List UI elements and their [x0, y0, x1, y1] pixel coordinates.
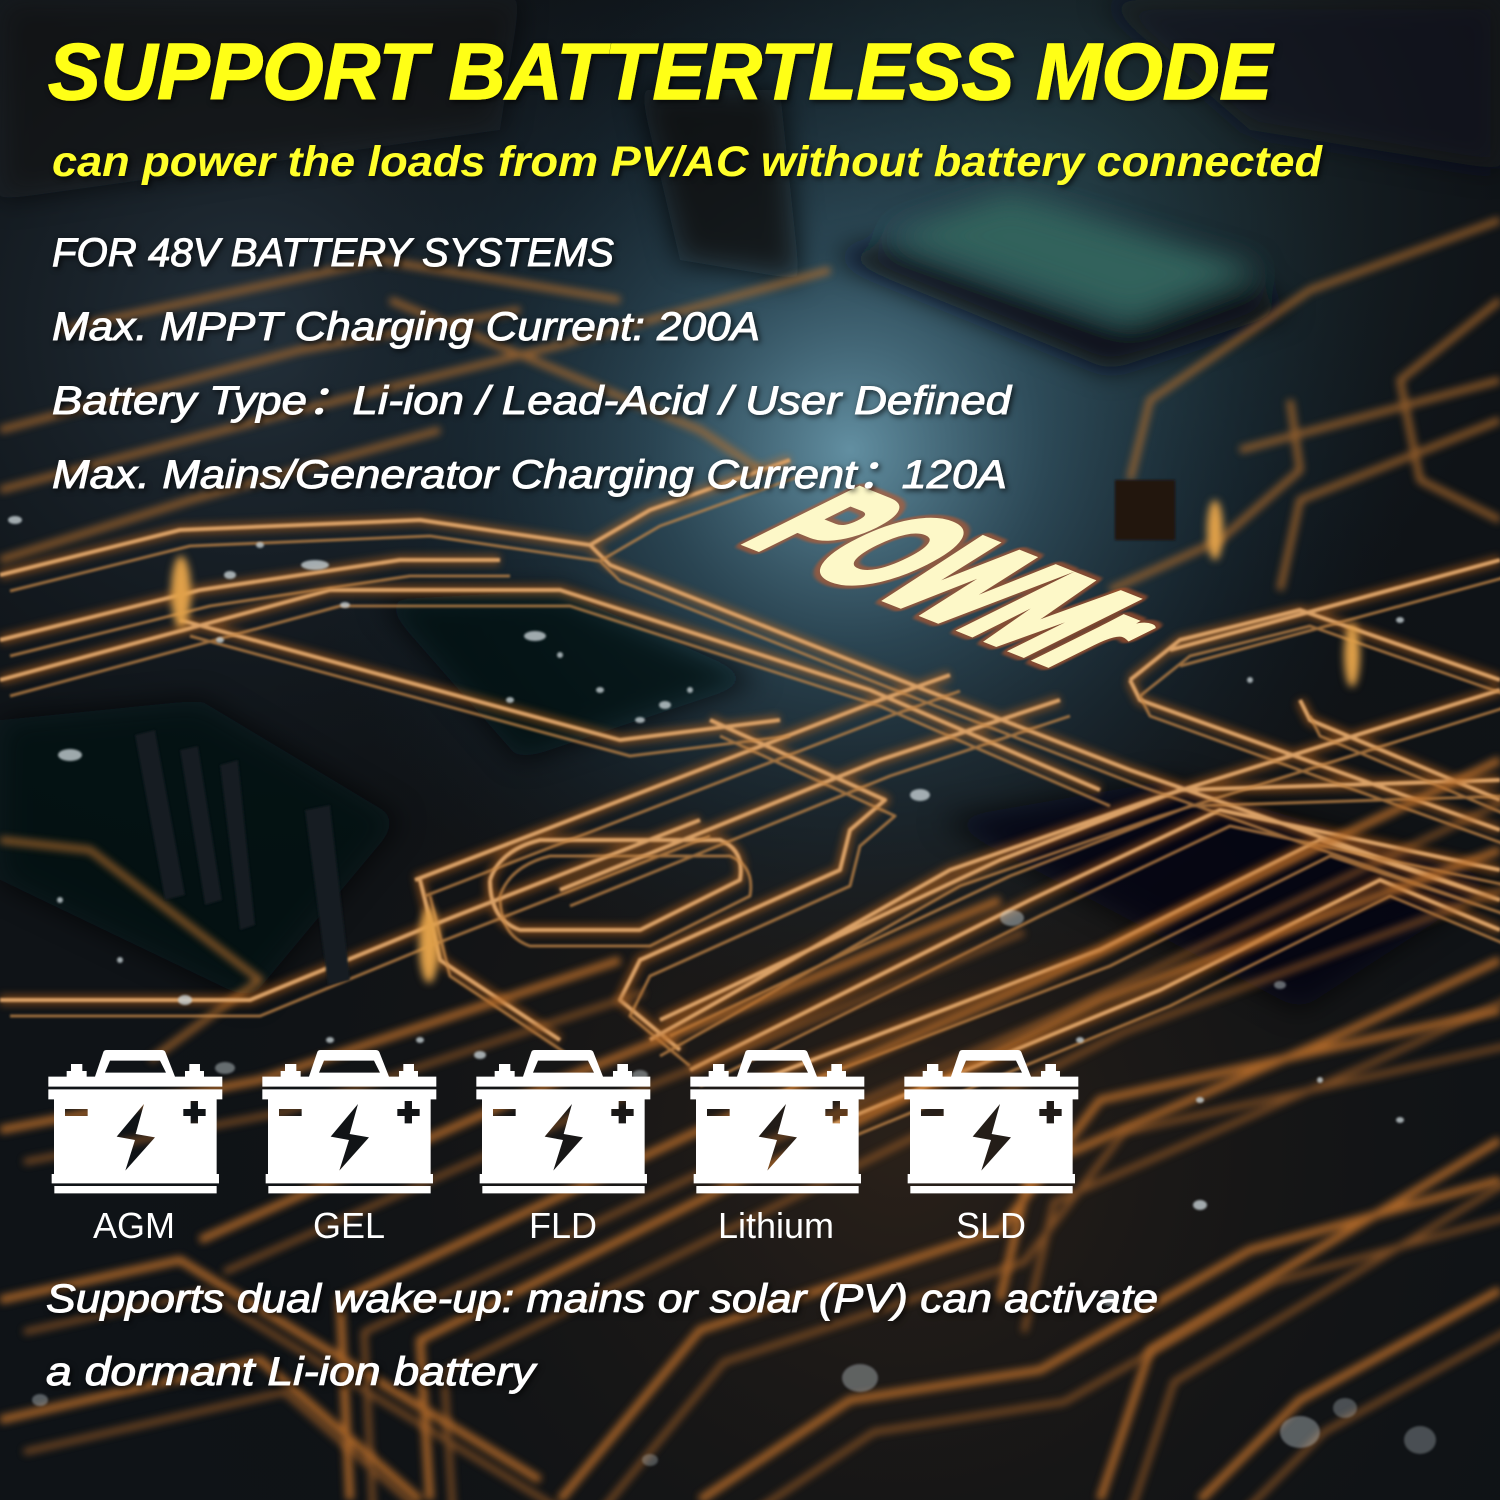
icon: GEL battery [262, 1050, 436, 1193]
brand logo on chip: POWMr [708, 470, 1209, 688]
soft traces [0, 220, 1500, 1060]
bright traces [0, 460, 1500, 1130]
lower traces [0, 760, 1500, 1500]
specifications list [52, 231, 1013, 497]
icon: AGM battery [48, 1050, 222, 1193]
label: FLD: FLD [529, 1205, 597, 1246]
dual wake-up note [46, 1277, 1158, 1394]
title: SUPPORT BATTERTLESS MODE [48, 27, 1275, 116]
dual wake-up note: a dormant Li-ion battery [46, 1350, 538, 1394]
battery type labels [93, 1205, 1026, 1246]
icon: SLD battery [904, 1050, 1078, 1193]
label: GEL: GEL [313, 1205, 385, 1246]
label: SLD: SLD [956, 1205, 1026, 1246]
subtitle: can power the loads from PV/AC without battery connected [52, 138, 1323, 186]
spec: MPPT charging current: Max. MPPT Charging Current: 200A [52, 305, 760, 349]
spec: system voltage: FOR 48V BATTERY SYSTEMS [52, 231, 614, 275]
parallel traces [10, 476, 1500, 1146]
spec: mains charging current: Max. Mains/Generator Charging Current：120A [52, 453, 1007, 497]
components [135, 480, 1175, 985]
icon: Lithium battery [690, 1050, 864, 1193]
trace glow [0, 460, 1500, 1130]
battery type icons [48, 1050, 1078, 1193]
brand logo on chip: POWMr [708, 470, 1209, 688]
icon: FLD battery [476, 1050, 650, 1193]
lower parallel traces [24, 792, 1500, 1500]
glowing nodes [171, 500, 1360, 983]
label: AGM: AGM [93, 1205, 175, 1246]
label: Lithium: Lithium [718, 1205, 834, 1246]
board specks [8, 516, 1436, 1466]
spec: battery type: Battery Type：Li-ion / Lead-Acid / User Defined [52, 379, 1013, 423]
dual wake-up note: Supports dual wake-up: mains or solar (PV) can activate [46, 1277, 1158, 1321]
